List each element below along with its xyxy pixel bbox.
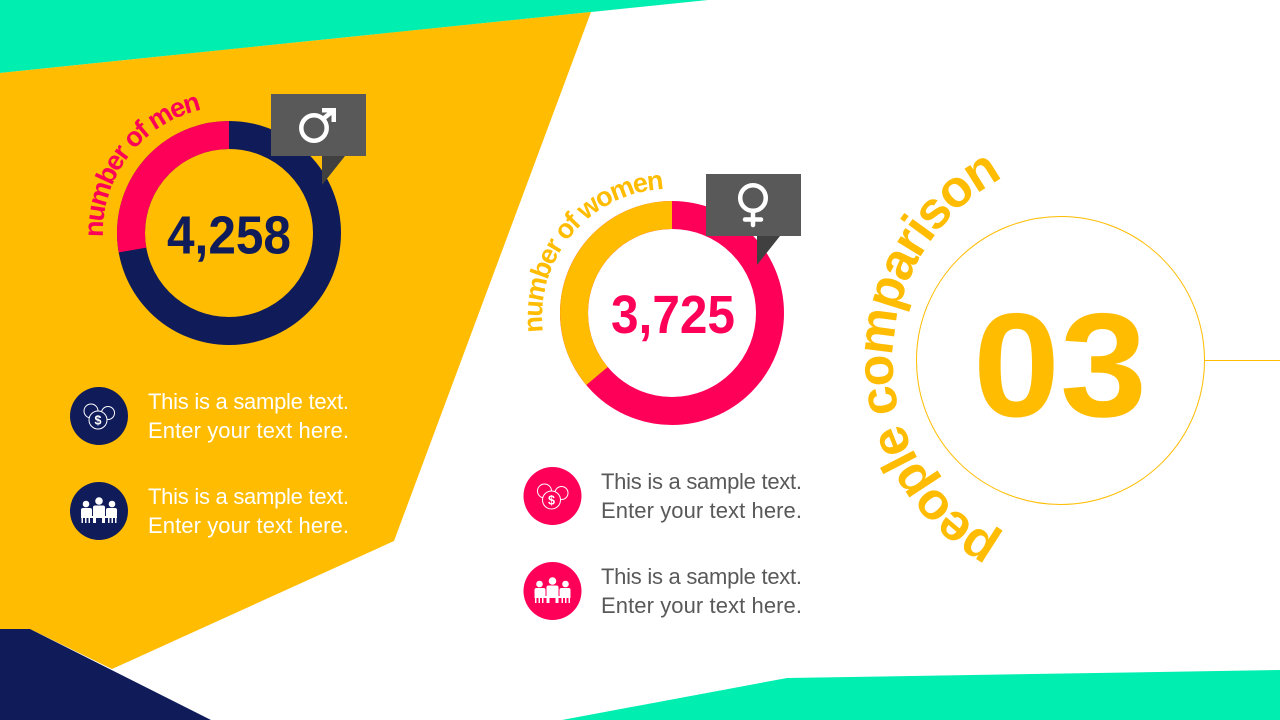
section number ring with connector xyxy=(916,216,1280,504)
callout: female symbol xyxy=(706,174,801,265)
shape: bottom teal band xyxy=(562,670,1280,720)
text: women line set 1 xyxy=(601,469,802,523)
text: women line set 2: This is a sample text. xyxy=(601,564,802,589)
text: men line set 1 xyxy=(148,389,349,443)
icon: coins navy xyxy=(70,387,128,445)
value: 3,725: 3,725 xyxy=(611,285,735,345)
text: women line set 1: Enter your text here. xyxy=(601,498,802,523)
label: number of men: number of men xyxy=(88,96,200,236)
number: 03: 03 xyxy=(973,283,1147,448)
shape: navy corner xyxy=(0,629,211,720)
icon: coins pink: $ xyxy=(548,494,555,508)
callout: male symbol xyxy=(271,94,366,185)
chart: men donut xyxy=(131,135,327,331)
chart: women donut xyxy=(574,215,770,411)
text: men line set 1: Enter your text here. xyxy=(148,418,349,443)
icon: coins pink xyxy=(524,467,582,525)
text: men line set 2 xyxy=(148,484,349,538)
value: 4,258: 4,258 xyxy=(167,206,291,266)
icon: meeting pink xyxy=(524,562,582,620)
text: men line set 2: This is a sample text. xyxy=(148,484,349,509)
panel: gold men panel xyxy=(0,12,591,669)
icon: meeting navy xyxy=(70,482,128,540)
text: women line set 2: Enter your text here. xyxy=(601,593,802,618)
text: women line set 2 xyxy=(601,564,802,618)
shape: top teal band xyxy=(0,0,708,73)
heading: people comparison: people comparison xyxy=(864,158,1002,563)
text: men line set 1: This is a sample text. xyxy=(148,389,349,414)
text: men line set 2: Enter your text here. xyxy=(148,513,349,538)
text: women line set 1: This is a sample text. xyxy=(601,469,802,494)
icon: coins navy: $ xyxy=(95,414,102,428)
label: number of women: number of women xyxy=(528,175,663,332)
